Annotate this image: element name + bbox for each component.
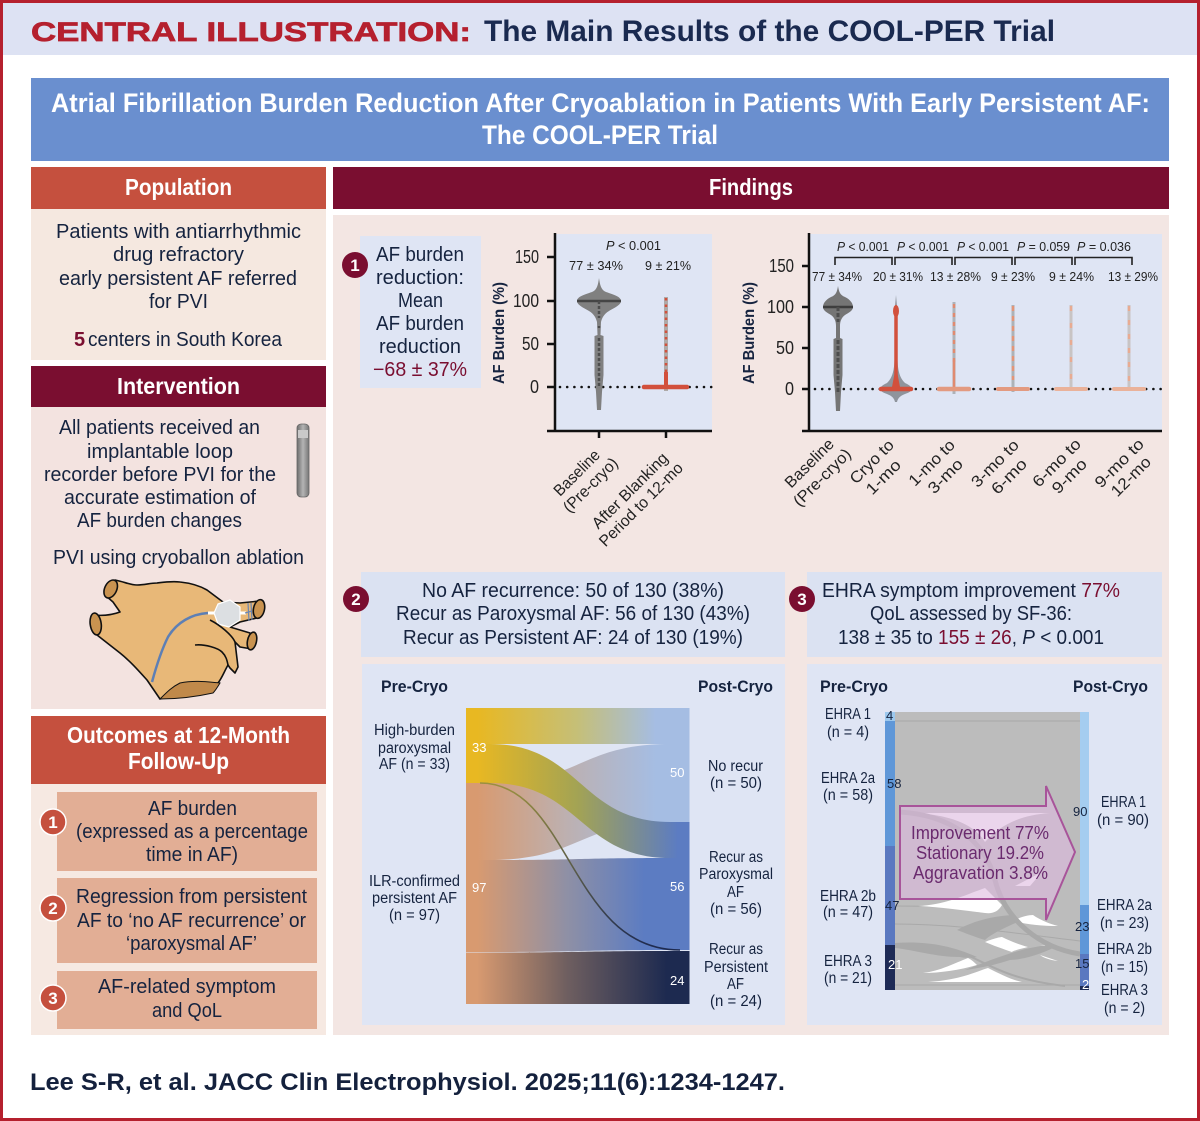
banner: trial title: Atrial Fibrillation Burden Reduction After Cryoablation in Patients With Early Persistent AF: — [51, 88, 1150, 118]
finding 2 text block — [343, 572, 785, 657]
significance brackets: P < 0.001 — [837, 239, 889, 254]
significance brackets: P < 0.001 — [957, 239, 1009, 254]
outcome 2: ‘paroxysmal AF’ — [126, 933, 257, 955]
outcome 3 — [40, 971, 317, 1029]
chart: AF burden by follow-up period: 3-mo to — [968, 437, 1023, 491]
violin: 6 to 9 months — [1056, 305, 1086, 391]
heading: findings: Findings — [709, 174, 793, 200]
panel: AF type sankey: Recur as — [709, 849, 763, 866]
finding 1 text block: AF burden — [376, 313, 464, 335]
finding 3 text block: QoL assessed by SF-36: — [870, 603, 1072, 625]
panel: EHRA symptom sankey: EHRA 3 — [1101, 982, 1148, 999]
finding 1 text block: −68 ± 37% — [373, 359, 467, 381]
violin: cryo to 1 month — [880, 295, 912, 402]
panel: EHRA symptom sankey: Pre-Cryo — [820, 677, 888, 696]
panel: AF type sankey: (n = 24) — [710, 993, 762, 1010]
panel: intervention: PVI using cryoballon ablation — [53, 547, 304, 569]
chart: AF burden by follow-up period: 100 — [767, 297, 794, 317]
finding 3 text block — [789, 572, 1162, 657]
chart: AF burden by follow-up period: 9-mo — [1049, 456, 1091, 498]
citation footer: Lee S-R, et al. JACC Clin Electrophysiol. 2025;11(6):1234-1247. — [30, 1069, 785, 1096]
banner: trial title: The COOL-PER Trial — [482, 120, 718, 150]
outcome 1: time in AF) — [146, 844, 238, 866]
significance brackets — [835, 239, 1132, 265]
chart: AF burden by follow-up period: Cryo to — [847, 437, 898, 488]
arrow: improvement summary — [900, 786, 1075, 920]
chart: AF burden baseline vs after blanking: 50 — [522, 334, 539, 354]
panel: EHRA symptom sankey: (n = 4) — [827, 724, 869, 741]
panel: AF type sankey: (n = 97) — [389, 907, 440, 924]
panel: EHRA symptom sankey: 2 — [1082, 977, 1089, 992]
outcome 2: AF to ‘no AF recurrence’ or — [77, 910, 306, 932]
panel: intervention: AF burden changes — [77, 510, 242, 532]
chart: AF burden by follow-up period: Baseline — [782, 436, 838, 492]
significance brackets: P < 0.001 — [897, 239, 949, 254]
finding 1 text block — [342, 236, 481, 388]
finding 3 text block: 3 — [797, 590, 807, 609]
sankey right nodes — [1080, 712, 1089, 990]
finding 1 text block: Mean — [398, 290, 443, 312]
panel: intervention: Intervention — [117, 373, 240, 399]
sankey flows — [895, 712, 1080, 990]
panel: AF type sankey: AF (n = 33) — [379, 756, 450, 773]
panel: AF type sankey: Persistent — [704, 959, 769, 976]
panel: intervention: accurate estimation of — [64, 487, 256, 509]
arrow: improvement summary: Aggravation 3.8% — [913, 863, 1048, 883]
outcome 1: (expressed as a percentage — [76, 821, 308, 843]
chart: AF burden baseline vs after blanking: 150 — [515, 247, 539, 267]
violin: 1 to 3 months — [939, 302, 969, 394]
panel: EHRA symptom sankey: 23 — [1075, 919, 1089, 934]
panel: population: Patients with antiarrhythmic — [56, 221, 301, 243]
outcome 2: Regression from persistent — [76, 886, 307, 908]
panel: EHRA symptom sankey — [807, 664, 1162, 1025]
violin: after blanking — [644, 297, 687, 391]
chart: AF burden baseline vs after blanking: 100 — [513, 291, 539, 311]
chart: AF burden baseline vs after blanking: (Pre-cryo) — [560, 455, 622, 516]
panel: EHRA symptom sankey: (n = 15) — [1101, 959, 1148, 976]
panel: AF type sankey: 24 — [670, 973, 684, 988]
panel: AF type sankey: AF — [727, 976, 744, 993]
chart: AF burden by follow-up period: 20 ± 31% — [873, 269, 923, 284]
finding 1 text block: reduction: — [376, 267, 464, 289]
chart: AF burden by follow-up period: 6-mo to — [1030, 436, 1085, 491]
main title — [31, 15, 1055, 48]
chart: AF burden by follow-up period: 12-mo — [1108, 454, 1155, 500]
arrow: improvement summary: Stationary 19.2% — [916, 843, 1044, 863]
panel: outcomes: Follow-Up — [128, 748, 229, 774]
finding 1 text block: 1 — [350, 256, 360, 275]
outcome 1: AF burden — [148, 798, 237, 820]
chart: AF burden baseline vs after blanking: 77 ± 34% — [569, 258, 623, 273]
finding 3 text block: 138 ± 35 to 155 ± 26, P < 0.001 — [838, 627, 1104, 649]
panel: EHRA symptom sankey: 4 — [886, 708, 893, 723]
chart: AF burden by follow-up period: 9 ± 23% — [991, 269, 1035, 284]
chart: AF burden by follow-up period: 150 — [769, 256, 794, 276]
panel: intervention: implantable loop — [87, 441, 233, 463]
panel: findings background — [333, 215, 1169, 1035]
panel: AF type sankey: 33 — [472, 740, 486, 755]
outcome 1 — [40, 792, 317, 871]
panel: outcomes: Outcomes at 12-Month — [67, 722, 290, 748]
panel: population: early persistent AF referred — [59, 268, 297, 290]
panel: population: 5 — [74, 329, 85, 351]
chart: AF burden by follow-up period: 13 ± 28% — [930, 269, 981, 284]
panel: EHRA symptom sankey: EHRA 2b — [820, 888, 876, 905]
panel: population: Population — [125, 174, 232, 200]
panel: EHRA symptom sankey: EHRA 2a — [1097, 897, 1152, 914]
outcome 1: 1 — [48, 813, 58, 832]
finding 1 text block: AF burden — [376, 244, 464, 266]
panel: AF type sankey: ILR-confirmed — [369, 873, 460, 890]
chart: AF burden by follow-up period: 3-mo — [925, 456, 967, 498]
violin: 3 to 6 months — [998, 305, 1028, 392]
chart: AF burden by follow-up period: 13 ± 29% — [1108, 269, 1158, 284]
outcome 3: 3 — [48, 989, 58, 1008]
finding 2 text block: 2 — [351, 590, 361, 609]
chart: AF burden by follow-up period: 1-mo to — [906, 437, 959, 490]
panel: EHRA symptom sankey: (n = 23) — [1100, 915, 1149, 932]
main title: CENTRAL ILLUSTRATION: — [31, 17, 471, 47]
panel: EHRA symptom sankey: Post-Cryo — [1073, 677, 1148, 696]
panel: population — [31, 167, 326, 360]
panel: EHRA symptom sankey: (n = 47) — [823, 904, 873, 921]
chart: AF burden by follow-up period: 9 ± 24% — [1049, 269, 1094, 284]
banner: trial title — [31, 78, 1169, 161]
violin: baseline — [577, 278, 621, 410]
outcome 2 — [40, 878, 317, 963]
panel: AF type sankey: Pre-Cryo — [381, 677, 448, 696]
panel: EHRA symptom sankey: 90 — [1073, 804, 1087, 819]
panel: AF type sankey: Paroxysmal — [699, 866, 773, 883]
panel: intervention: All patients received an — [59, 417, 260, 439]
panel: AF type sankey: paroxysmal — [378, 740, 451, 757]
chart: AF burden baseline vs after blanking: 9 ± 21% — [645, 258, 691, 273]
chart: AF burden by follow-up period: 77 ± 34% — [812, 269, 862, 284]
chart: AF burden baseline vs after blanking: P < 0.001 — [606, 238, 661, 253]
panel: AF type sankey: (n = 56) — [710, 901, 762, 918]
header band — [3, 3, 1197, 55]
chart: AF burden by follow-up period: (Pre-cryo) — [790, 446, 855, 510]
panel: EHRA symptom sankey: (n = 58) — [823, 787, 873, 804]
chart: AF burden by follow-up period: 9-mo to — [1092, 436, 1148, 492]
sankey flows — [466, 708, 690, 1004]
violin: baseline — [823, 286, 853, 411]
outcome 2: 2 — [48, 899, 58, 918]
panel: EHRA symptom sankey: EHRA 1 — [1101, 794, 1146, 811]
panel: AF type sankey: persistent AF — [372, 890, 457, 907]
chart: AF burden baseline vs after blanking — [491, 233, 712, 550]
finding 2 text block: No AF recurrence: 50 of 130 (38%) — [422, 580, 724, 602]
chart: AF burden baseline vs after blanking: After Blanking — [589, 450, 672, 533]
finding 3 text block: EHRA symptom improvement 77% — [822, 580, 1120, 602]
panel: population: drug refractory — [113, 244, 244, 266]
violin: 9 to 12 months — [1114, 305, 1144, 391]
significance brackets: P = 0.059 — [1017, 239, 1070, 254]
chart: AF burden by follow-up period: 50 — [776, 338, 794, 358]
panel: EHRA symptom sankey: 15 — [1075, 956, 1089, 971]
panel: EHRA symptom sankey: 47 — [885, 898, 899, 913]
panel: EHRA symptom sankey: EHRA 2a — [821, 770, 875, 787]
main title: The Main Results of the COOL-PER Trial — [484, 15, 1055, 48]
chart: AF burden baseline vs after blanking: Period to 12-mo — [596, 460, 687, 550]
panel: intervention: recorder before PVI for the — [44, 464, 276, 486]
panel: AF type sankey: Recur as — [709, 941, 763, 958]
panel: EHRA symptom sankey: EHRA 3 — [824, 953, 872, 970]
chart: AF burden baseline vs after blanking: AF Burden (%) — [491, 282, 508, 384]
icon: heart with cryoballoon — [89, 578, 266, 699]
panel: EHRA symptom sankey: (n = 21) — [824, 970, 872, 987]
panel: AF type sankey: 50 — [670, 765, 684, 780]
panel: EHRA symptom sankey: EHRA 2b — [1097, 941, 1152, 958]
chart: AF burden by follow-up period: 1-mo — [863, 457, 905, 499]
panel: EHRA symptom sankey: (n = 90) — [1097, 812, 1149, 829]
chart: AF burden baseline vs after blanking: Baseline — [551, 447, 604, 500]
finding 1 text block: reduction — [379, 336, 461, 358]
chart: AF burden baseline vs after blanking: 0 — [530, 377, 539, 397]
panel: AF type sankey: No recur — [708, 758, 763, 775]
panel: intervention — [31, 366, 326, 709]
panel: population: for PVI — [149, 291, 208, 313]
panel: outcomes — [31, 716, 326, 1035]
significance brackets: P = 0.036 — [1077, 239, 1131, 254]
panel: AF type sankey: 56 — [670, 879, 684, 894]
arrow: improvement summary: Improvement 77% — [911, 823, 1049, 843]
panel: AF type sankey: High-burden — [374, 722, 455, 739]
chart: AF burden by follow-up period: 6-mo — [988, 456, 1031, 498]
panel: AF type sankey — [362, 664, 785, 1025]
panel: AF type sankey: AF — [727, 884, 744, 901]
outcome 3: AF-related symptom — [98, 976, 276, 998]
panel: AF type sankey: 97 — [472, 880, 486, 895]
panel: population: centers in South Korea — [88, 329, 283, 351]
panel: AF type sankey: (n = 50) — [710, 775, 762, 792]
icon: implantable loop recorder — [297, 424, 309, 497]
finding 2 text block: Recur as Paroxysmal AF: 56 of 130 (43%) — [396, 603, 750, 625]
panel: AF type sankey: Post-Cryo — [698, 677, 773, 696]
heading: findings — [333, 167, 1169, 209]
finding 2 text block: Recur as Persistent AF: 24 of 130 (19%) — [403, 627, 743, 649]
panel: EHRA symptom sankey: 21 — [888, 957, 902, 972]
chart: AF burden by follow-up period — [741, 233, 1162, 510]
chart: AF burden by follow-up period: 0 — [785, 379, 794, 399]
chart: AF burden by follow-up period: AF Burden (%) — [741, 282, 758, 384]
panel: EHRA symptom sankey: (n = 2) — [1104, 1000, 1145, 1017]
outcome 3: and QoL — [152, 1000, 222, 1022]
panel: EHRA symptom sankey: 58 — [887, 776, 901, 791]
panel: EHRA symptom sankey: EHRA 1 — [825, 706, 871, 723]
sankey left nodes — [885, 712, 895, 990]
